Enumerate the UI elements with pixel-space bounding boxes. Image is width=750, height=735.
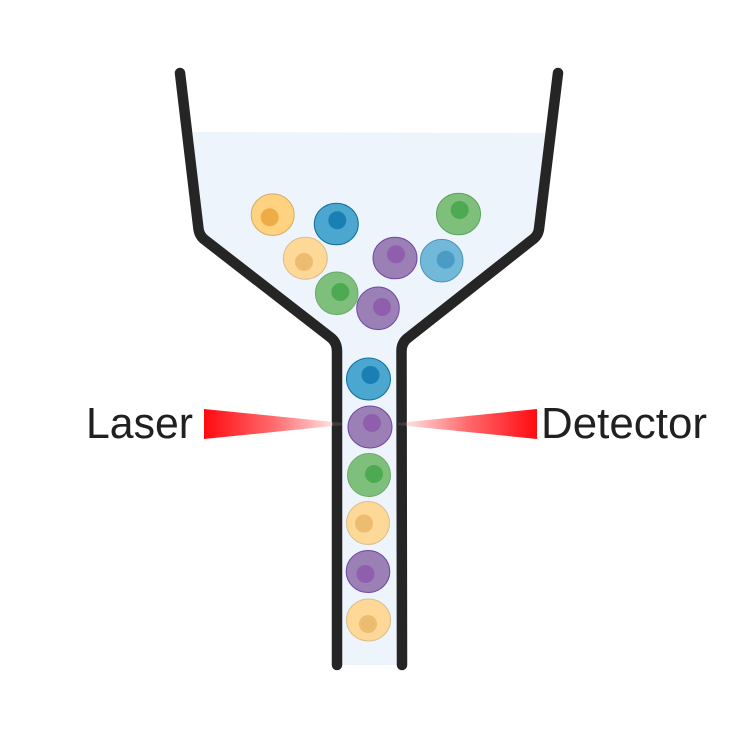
cell: light blue bbox=[420, 239, 463, 282]
cell: purple bbox=[346, 550, 390, 592]
laser beam bbox=[204, 409, 343, 439]
cells in the funnel bbox=[251, 193, 480, 330]
cell: pale orange bbox=[283, 237, 327, 279]
detector beam bbox=[398, 409, 537, 439]
right funnel wall bbox=[402, 73, 558, 665]
cell: green bbox=[348, 454, 390, 496]
cell: green bbox=[315, 272, 358, 315]
cell: blue bbox=[314, 203, 358, 245]
liquid fill bbox=[193, 132, 547, 665]
cell: purple bbox=[373, 237, 417, 279]
cell: purple bbox=[357, 287, 399, 330]
cells in the channel bbox=[346, 358, 392, 641]
cell: orange bbox=[251, 194, 294, 236]
cell: blue bbox=[346, 358, 390, 400]
cell: pale orange bbox=[346, 502, 390, 544]
label: Laser: Laser bbox=[86, 399, 193, 448]
left funnel wall bbox=[180, 73, 337, 665]
cell: purple bbox=[348, 406, 392, 448]
label: Detector: Detector bbox=[541, 399, 707, 448]
funnel walls bbox=[180, 73, 558, 665]
cell: pale orange bbox=[346, 599, 390, 641]
cell: green bbox=[436, 193, 480, 235]
